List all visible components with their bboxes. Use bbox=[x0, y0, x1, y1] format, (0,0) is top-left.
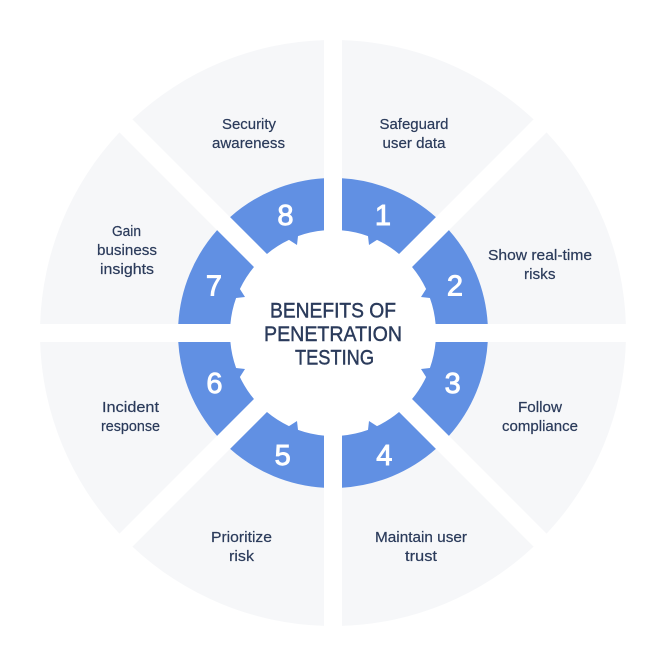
blue band 3 bbox=[412, 342, 488, 436]
number 1: 1 bbox=[375, 200, 391, 232]
segment 6: incident response bbox=[40, 342, 254, 534]
number 3: 3 bbox=[445, 368, 461, 400]
label 2: Show real-time bbox=[488, 248, 592, 264]
label 6: response bbox=[101, 419, 160, 435]
label 3: compliance bbox=[502, 419, 578, 435]
title: TESTING bbox=[295, 346, 374, 370]
segment 2: show real-time risks bbox=[412, 132, 626, 324]
number 7: 7 bbox=[206, 270, 222, 302]
label 5: risk bbox=[229, 549, 255, 565]
segment 7: gain business insights bbox=[40, 132, 254, 324]
title: PENETRATION bbox=[264, 322, 402, 346]
label 8: awareness bbox=[212, 136, 285, 152]
label 7: insights bbox=[100, 262, 154, 278]
blue band 8 bbox=[230, 178, 324, 254]
label 6: Incident bbox=[102, 400, 159, 416]
number 2: 2 bbox=[447, 270, 463, 302]
blue band 4 bbox=[342, 412, 436, 488]
label 8: Security bbox=[222, 117, 277, 133]
title: BENEFITS OF bbox=[270, 298, 396, 322]
blue band 2 bbox=[412, 230, 488, 324]
number 8: 8 bbox=[277, 200, 294, 232]
label 7: business bbox=[97, 243, 157, 259]
segment 4: maintain user trust bbox=[342, 412, 534, 626]
number 5: 5 bbox=[275, 440, 291, 472]
label 7: Gain bbox=[112, 224, 141, 240]
segment 5: prioritize risk bbox=[132, 412, 324, 626]
label 3: Follow bbox=[518, 400, 563, 416]
segment 8: security awareness bbox=[132, 40, 324, 254]
number 6: 6 bbox=[206, 368, 223, 400]
label 1: user data bbox=[382, 136, 446, 152]
label 1: Safeguard bbox=[380, 117, 448, 133]
label 4: Maintain user bbox=[375, 530, 467, 546]
blue band 1 bbox=[342, 178, 436, 254]
label 4: trust bbox=[405, 549, 437, 565]
blue band 5 bbox=[230, 412, 324, 488]
blue band 7 bbox=[178, 230, 254, 324]
label 2: risks bbox=[524, 267, 556, 283]
segment 3: follow compliance bbox=[412, 342, 626, 534]
blue band 6 bbox=[178, 342, 254, 436]
segment 1: safeguard user data bbox=[342, 40, 534, 254]
number 4: 4 bbox=[376, 440, 392, 472]
label 5: Prioritize bbox=[211, 530, 272, 546]
